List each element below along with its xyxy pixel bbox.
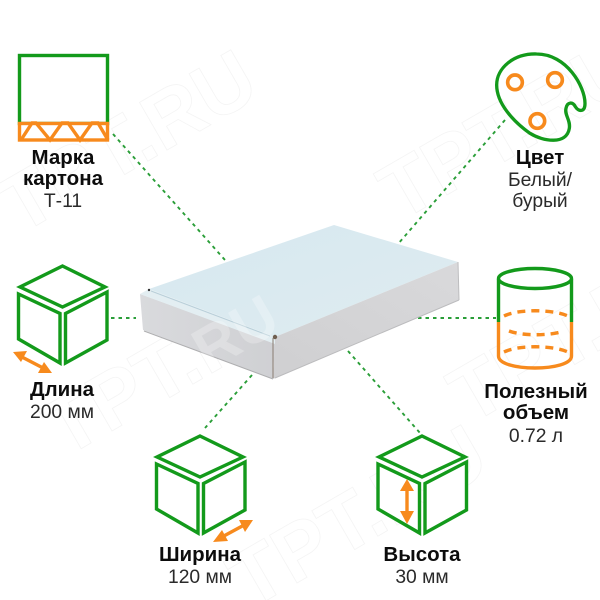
label: colour xyxy=(508,146,573,212)
label: length xyxy=(30,378,95,423)
icon: cube with length arrow xyxy=(13,266,107,373)
label: usable volume: 0.72 л xyxy=(509,426,563,447)
dashed connector lines xyxy=(111,120,505,433)
arrow: height xyxy=(400,479,414,524)
label: height: Высота xyxy=(383,543,461,566)
icon: cube with width arrow xyxy=(156,436,253,542)
icon: colour palette xyxy=(497,54,585,140)
label: colour: бурый xyxy=(512,191,568,212)
product photo: white cardboard box xyxy=(140,225,459,383)
label: cardboard grade xyxy=(23,146,104,212)
icon: cylinder with usable volume xyxy=(498,268,572,368)
label: length: Длина xyxy=(30,378,95,401)
arrow: width xyxy=(213,520,253,542)
label: cardboard grade: Марка xyxy=(32,146,95,169)
label: usable volume: Полезный xyxy=(484,380,588,403)
label: width: Ширина xyxy=(159,543,242,566)
label: height: 30 мм xyxy=(395,567,449,588)
label: colour: Белый/ xyxy=(508,170,573,191)
label: width xyxy=(159,543,242,588)
label: width: 120 мм xyxy=(168,567,232,588)
icon: cube with height arrow xyxy=(378,436,466,533)
label: usable volume: объем xyxy=(503,401,569,424)
product photo: white cardboard box: RU xyxy=(181,282,290,383)
icon: corrugated cardboard grade xyxy=(20,56,108,140)
label: height xyxy=(383,543,461,588)
label: colour: Цвет xyxy=(516,146,564,169)
label: usable volume xyxy=(484,380,588,447)
watermark pattern: TPT.RU xyxy=(29,256,316,473)
label: cardboard grade: картона xyxy=(23,167,104,190)
arrow: length xyxy=(13,351,52,373)
label: cardboard grade: Т-11 xyxy=(44,191,82,212)
label: length: 200 мм xyxy=(30,402,94,423)
